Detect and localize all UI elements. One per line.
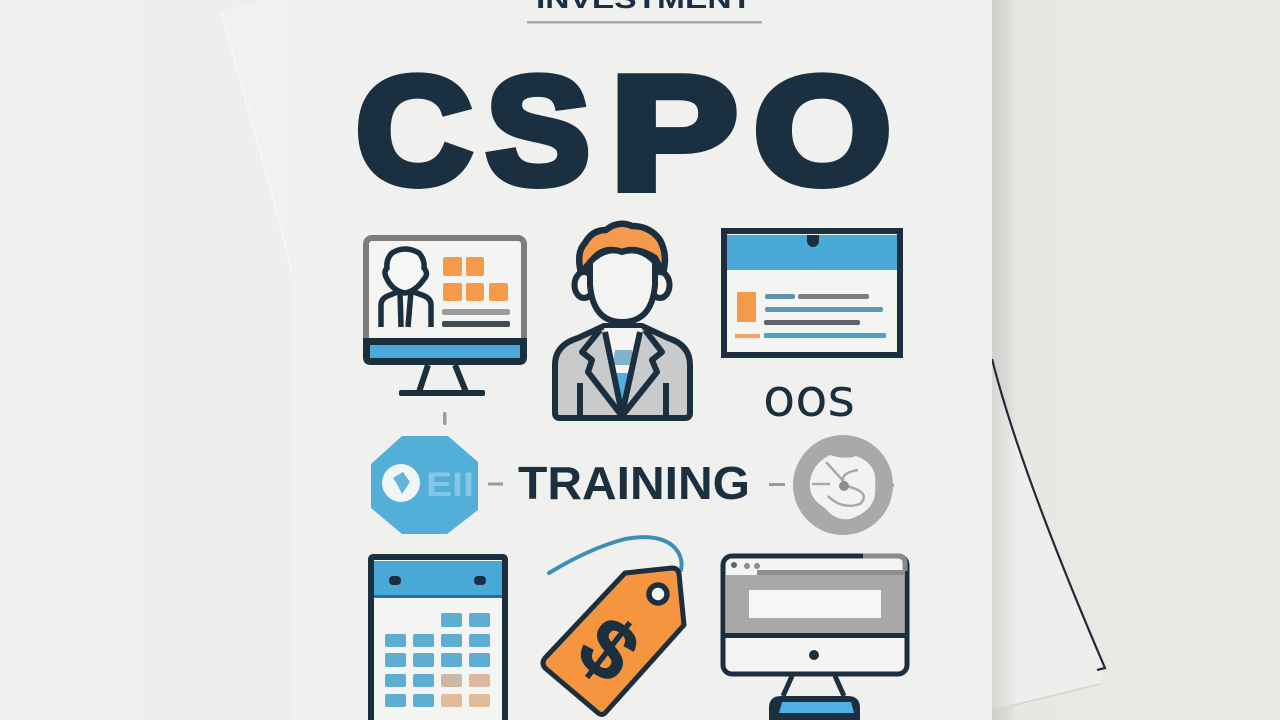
- dash right: [769, 483, 785, 486]
- dash left: [488, 482, 503, 486]
- icon: price tag: [543, 537, 684, 714]
- page shadow right: [992, 0, 1016, 720]
- icon: monitor with profile: [363, 238, 527, 396]
- title: CSPO: [356, 44, 891, 223]
- title: CSPO: O: [754, 45, 891, 215]
- main page: [292, 0, 992, 720]
- curled back sheet: [992, 358, 1105, 709]
- title: CSPO: S: [486, 45, 590, 216]
- monitor avatar: [381, 249, 431, 327]
- icon: calendar: [371, 557, 505, 720]
- tick mark: [443, 412, 446, 425]
- title: CSPO: C: [356, 47, 472, 216]
- icon: blue octagon badge: [371, 436, 478, 534]
- back sheet left: [221, 0, 292, 275]
- icon: blue octagon badge: EII: [426, 466, 474, 504]
- label: oos: oos: [763, 369, 855, 429]
- heading: training: TRAINING: [518, 457, 750, 509]
- icon: gray circle badge: [793, 435, 894, 535]
- icon: browser window: [724, 231, 900, 355]
- title: CSPO: P: [610, 44, 738, 223]
- icon: desktop computer: [723, 556, 907, 720]
- monitor tiles: [443, 257, 508, 301]
- icon: price tag: $: [562, 598, 656, 701]
- icon: businessperson: [555, 224, 690, 418]
- calendar day cells: [385, 613, 490, 707]
